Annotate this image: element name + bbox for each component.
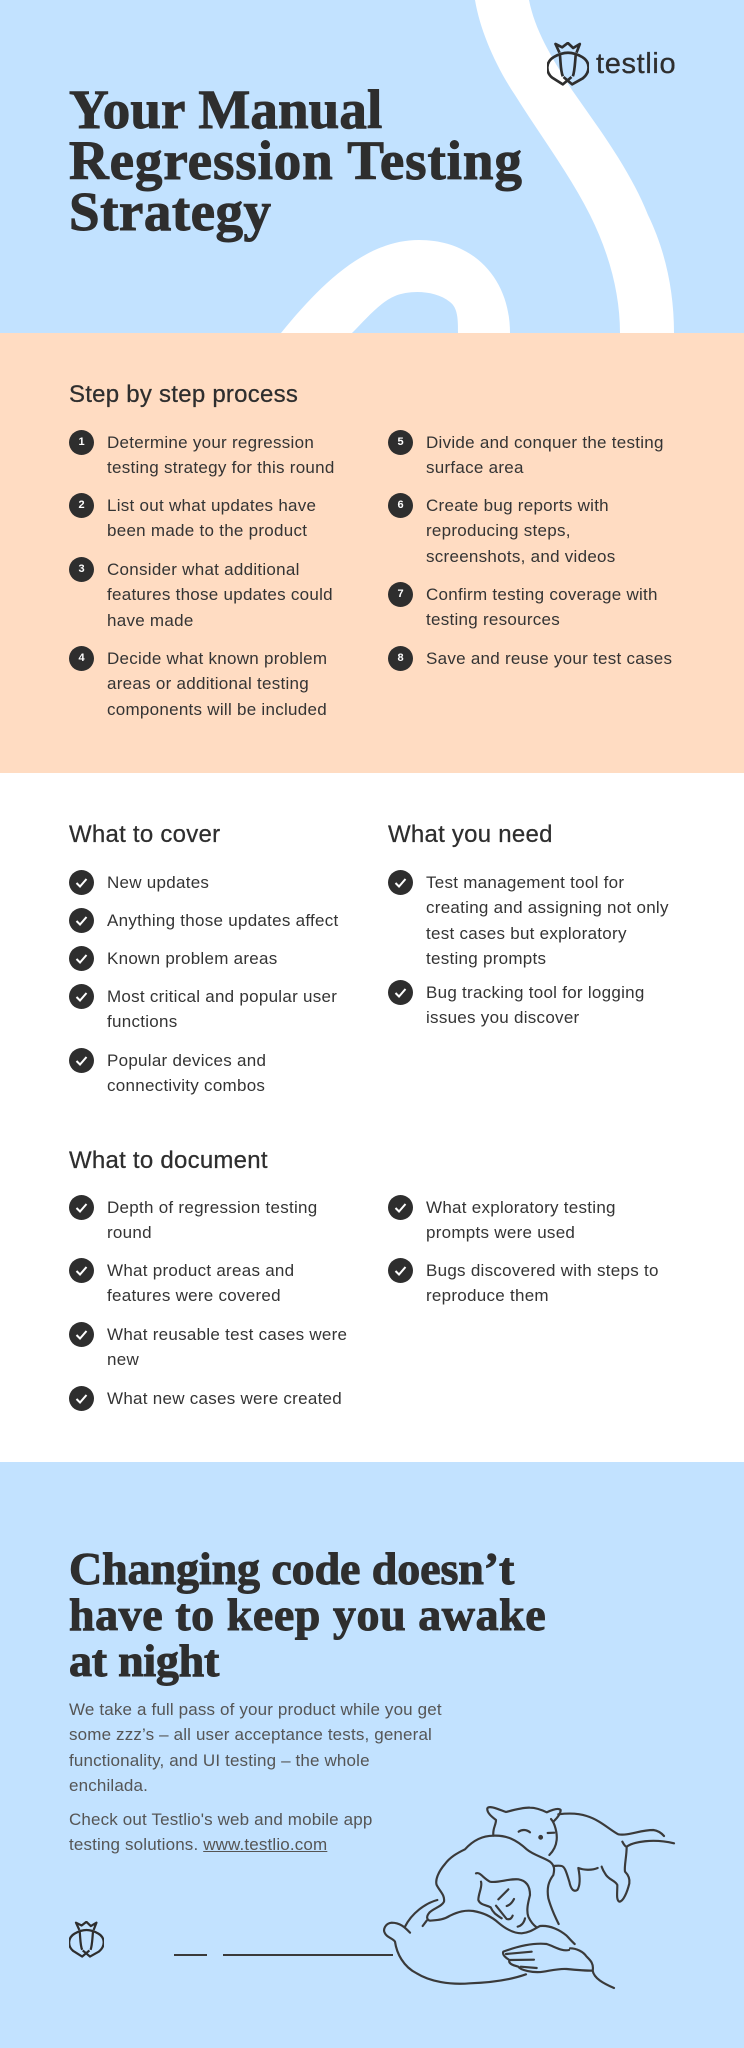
step 5: 5 — [397, 436, 404, 448]
step 6 — [388, 493, 616, 566]
step 4: 4 — [78, 652, 85, 664]
heading: what you need: What you need — [388, 821, 553, 848]
document item 6: Bugs discovered with steps to — [426, 1261, 659, 1280]
document item 3: What reusable test cases were — [107, 1325, 347, 1344]
step 5: Divide and conquer the testing — [426, 433, 664, 452]
closing paragraph: enchilada. — [69, 1776, 148, 1795]
need item 1 — [388, 870, 669, 968]
cover item 4 — [69, 984, 337, 1031]
document item 3: new — [107, 1350, 139, 1369]
document item 5: What exploratory testing — [426, 1198, 616, 1217]
document item 4 — [69, 1386, 342, 1411]
step 2: been made to the product — [107, 521, 307, 540]
step 7: Confirm testing coverage with — [426, 585, 658, 604]
closing title: have to keep you awake — [69, 1589, 546, 1640]
step 6: screenshots, and videos — [426, 547, 616, 566]
title — [69, 79, 523, 242]
link paragraph — [69, 1810, 372, 1854]
step 1: testing strategy for this round — [107, 458, 335, 477]
document item 5 — [388, 1195, 616, 1242]
closing paragraph: We take a full pass of your product while you get — [69, 1700, 442, 1719]
step 3: features those updates could — [107, 585, 333, 604]
panel: closing call to action — [0, 1462, 744, 2048]
document item 4: What new cases were created — [107, 1389, 342, 1408]
step 3: Consider what additional — [107, 560, 300, 579]
step 3 — [69, 557, 333, 630]
step 7: testing resources — [426, 610, 560, 629]
step 1: Determine your regression — [107, 433, 314, 452]
cover item 3 — [69, 946, 278, 971]
heading: what to document: What to document — [69, 1147, 268, 1174]
cover item 5 — [69, 1048, 266, 1095]
step 1: 1 — [78, 436, 85, 448]
step 7: 7 — [397, 588, 404, 600]
closing paragraph: some zzz’s – all user acceptance tests, general — [69, 1725, 432, 1744]
document item 3 — [69, 1322, 347, 1369]
closing title — [69, 1543, 546, 1686]
closing title: Changing code doesn’t — [69, 1543, 514, 1594]
step 4 — [69, 646, 327, 719]
title: Strategy — [69, 181, 272, 242]
link paragraph: testing solutions. www.testlio.com — [69, 1835, 327, 1854]
document item 1 — [69, 1195, 317, 1242]
heading: step by step: Step by step process — [69, 381, 298, 408]
step 4: areas or additional testing — [107, 674, 309, 693]
cover item 1: New updates — [107, 873, 209, 892]
closing title: at night — [69, 1635, 219, 1686]
cover item 3: Known problem areas — [107, 949, 278, 968]
need item 2: issues you discover — [426, 1008, 579, 1027]
cover item 2: Anything those updates affect — [107, 911, 339, 930]
need item 2: Bug tracking tool for logging — [426, 983, 645, 1002]
step 5: surface area — [426, 458, 524, 477]
step 2: 2 — [78, 499, 85, 511]
cover item 4: functions — [107, 1012, 177, 1031]
illustration: person sleeping with cat — [382, 1806, 676, 1990]
closing paragraph — [69, 1700, 442, 1795]
icon: testlio crown shield — [547, 42, 589, 86]
step 8: Save and reuse your test cases — [426, 649, 672, 668]
step 7 — [388, 582, 658, 629]
cover item 4: Most critical and popular user — [107, 987, 337, 1006]
logo: testlio — [547, 42, 676, 86]
step 3: 3 — [78, 563, 85, 575]
ground line — [174, 1954, 393, 1956]
document item 2: features were covered — [107, 1286, 281, 1305]
need item 1: test cases but exploratory — [426, 924, 627, 943]
need item 2 — [388, 980, 645, 1027]
document item 2 — [69, 1258, 294, 1305]
title: Regression Testing — [69, 130, 523, 191]
need item 1: Test management tool for — [426, 873, 624, 892]
document item 6 — [388, 1258, 659, 1305]
step 2: List out what updates have — [107, 496, 316, 515]
document item 2: What product areas and — [107, 1261, 294, 1280]
heading: what to cover: What to cover — [69, 821, 220, 848]
icon: testlio crown shield footer — [69, 1921, 104, 1958]
step 3: have made — [107, 611, 194, 630]
step 8 — [388, 646, 672, 671]
link paragraph: Check out Testlio's web and mobile app — [69, 1810, 372, 1829]
document item 1: Depth of regression testing — [107, 1198, 317, 1217]
decorative white curves — [281, 0, 674, 333]
step 2 — [69, 493, 316, 540]
cover item 5: connectivity combos — [107, 1076, 265, 1095]
document item 1: round — [107, 1223, 152, 1242]
cover item 1 — [69, 870, 209, 895]
step 1 — [69, 430, 335, 477]
need item 1: creating and assigning not only — [426, 898, 669, 917]
cover item 2 — [69, 908, 339, 933]
step 6: reproducing steps, — [426, 521, 571, 540]
step 6: 6 — [397, 499, 404, 511]
step 8: 8 — [397, 652, 404, 664]
need item 1: testing prompts — [426, 949, 546, 968]
cover item 5: Popular devices and — [107, 1051, 266, 1070]
header band — [0, 0, 744, 333]
title: Your Manual — [69, 79, 382, 140]
step 5 — [388, 430, 664, 477]
document item 6: reproduce them — [426, 1286, 549, 1305]
closing paragraph: functionality, and UI testing – the whole — [69, 1751, 370, 1770]
panel: step by step process — [0, 333, 744, 773]
document item 5: prompts were used — [426, 1223, 575, 1242]
step 4: Decide what known problem — [107, 649, 327, 668]
logo wordmark: testlio — [596, 48, 676, 80]
step 6: Create bug reports with — [426, 496, 609, 515]
step 4: components will be included — [107, 700, 327, 719]
